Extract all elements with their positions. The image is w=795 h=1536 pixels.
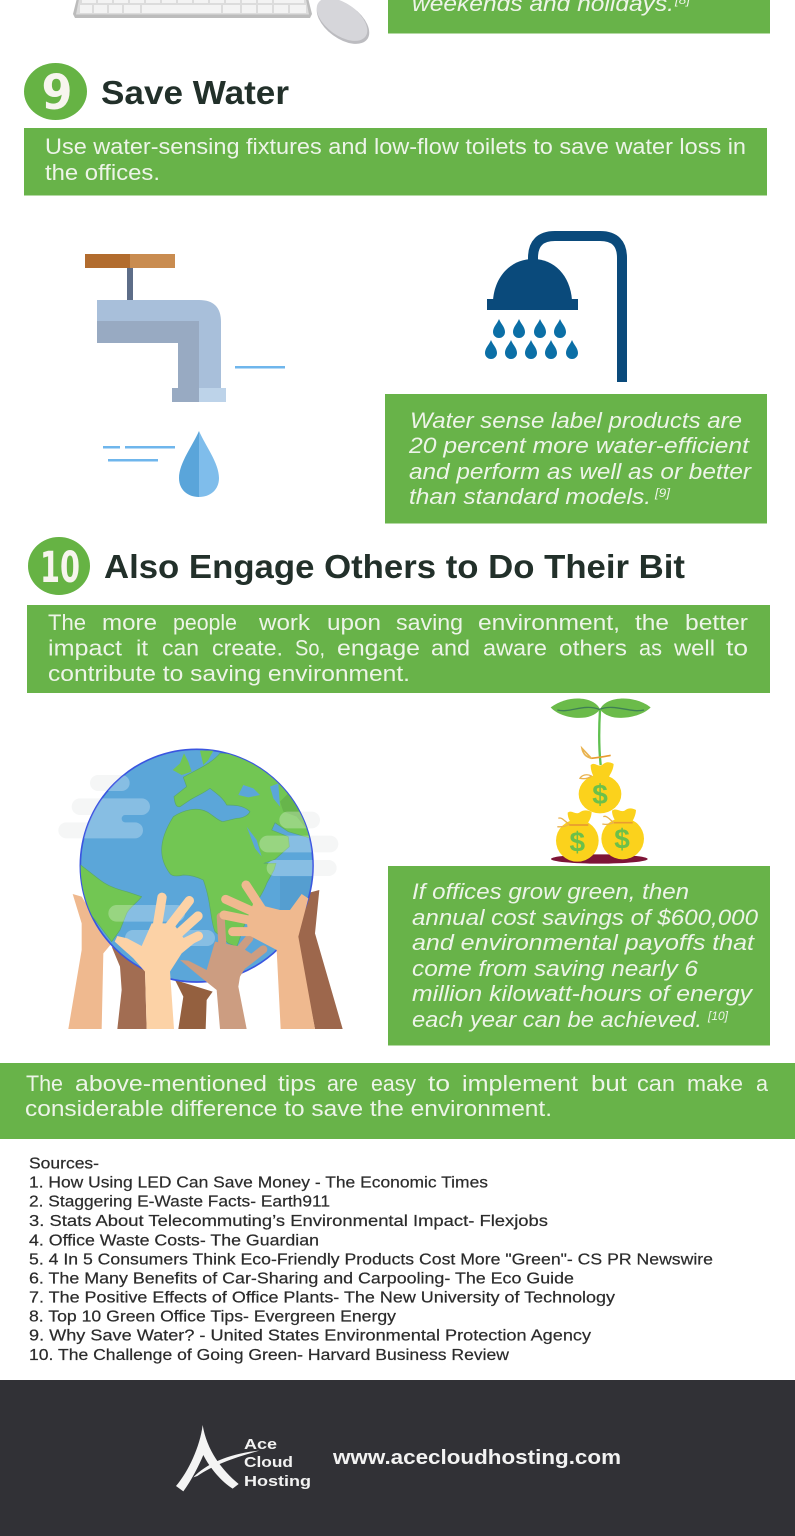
panel: engage others text: work bbox=[258, 610, 311, 635]
panel: offices grow green: each year can be achieved. bbox=[412, 1007, 702, 1032]
text block: sources list: 5. 4 In 5 Consumers Think Eco-Friendly Products Cost More "Green"- CS PR Newswire bbox=[29, 1252, 713, 1268]
text block: sources list: 6. The Many Benefits of Car-Sharing and Carpooling- The Eco Guide bbox=[29, 1270, 574, 1288]
icon: dripping faucet bbox=[85, 254, 285, 497]
panel: engage others text: others bbox=[559, 636, 627, 660]
panel: engage others text bbox=[27, 605, 770, 693]
panel: conclusion bar: make bbox=[687, 1071, 743, 1096]
text block: sources list: 2. Staggering E-Waste Facts- Earth911 bbox=[29, 1194, 330, 1210]
icon: money bags with sprout bbox=[551, 698, 651, 864]
panel: engage others text: contribute to saving environment. bbox=[48, 661, 410, 686]
panel: conclusion bar: but bbox=[591, 1071, 628, 1096]
panel: footer bbox=[0, 1380, 795, 1536]
faint clouds behind globe bbox=[58, 775, 338, 876]
panel: use water-sensing fixtures: Use water-sensing fixtures and low-flow toilets to save water loss in bbox=[45, 134, 746, 159]
illustration: hands holding globe bbox=[58, 749, 343, 1029]
panel: use water-sensing fixtures: the offices. bbox=[45, 160, 160, 185]
panel: conclusion bar: are bbox=[327, 1071, 358, 1096]
panel: conclusion bar: above-mentioned bbox=[75, 1071, 267, 1096]
icon: number 10 badge bbox=[28, 537, 90, 595]
panel: engage others text: it bbox=[136, 636, 149, 660]
panel: engage others text: impact bbox=[48, 636, 123, 660]
callout: weekends and holidays bbox=[388, 0, 770, 34]
text block: sources list: 3. Stats About Telecommuting’s Environmental Impact- Flexjobs bbox=[29, 1213, 548, 1230]
panel: conclusion bar bbox=[0, 1063, 795, 1139]
icon: shower head bbox=[485, 236, 622, 382]
text block: sources list: Sources- bbox=[29, 1156, 99, 1172]
panel: use water-sensing fixtures bbox=[24, 128, 767, 196]
icon: money bags with sprout: $ bbox=[592, 779, 608, 810]
icon: money bags with sprout: $ bbox=[614, 824, 630, 855]
panel: offices grow green: million kilowatt-hours of energy bbox=[412, 981, 754, 1006]
arms behind globe bbox=[68, 890, 343, 1029]
panel: engage others text: aware bbox=[483, 636, 547, 660]
panel: engage others text: better bbox=[685, 610, 749, 635]
panel: engage others text: well bbox=[673, 636, 715, 660]
panel: engage others text: more bbox=[102, 610, 157, 635]
icon: number 10 badge: 10 bbox=[40, 543, 80, 593]
panel: engage others text: The bbox=[48, 610, 86, 635]
panel: engage others text: people bbox=[173, 610, 237, 635]
logo: Ace Cloud Hosting: Cloud bbox=[244, 1454, 293, 1471]
panel: engage others text: as bbox=[639, 636, 662, 660]
panel: conclusion bar: The bbox=[26, 1071, 63, 1096]
panel: conclusion bar: tips bbox=[278, 1071, 316, 1096]
logo: Ace Cloud Hosting bbox=[176, 1425, 311, 1491]
icon: money bags with sprout: $ bbox=[570, 826, 586, 857]
panel: water sense label products: [9] bbox=[654, 486, 671, 500]
panel: engage others text: saving bbox=[396, 610, 463, 635]
icon: keyboard and mouse bbox=[73, 0, 377, 53]
text block: sources list bbox=[29, 1156, 713, 1364]
panel: engage others text: So, bbox=[295, 636, 325, 660]
text block: sources list: 8. Top 10 Green Office Tips- Evergreen Energy bbox=[29, 1308, 396, 1326]
text block: sources list: 1. How Using LED Can Save Money - The Economic Times bbox=[29, 1174, 488, 1192]
panel: offices grow green bbox=[388, 866, 770, 1046]
logo: Ace Cloud Hosting: Hosting bbox=[244, 1473, 311, 1490]
panel: water sense label products: than standard models. bbox=[409, 484, 651, 509]
panel: water sense label products: Water sense label products are bbox=[410, 408, 742, 433]
panel: engage others text: upon bbox=[327, 610, 381, 635]
panel: conclusion bar: implement bbox=[462, 1071, 579, 1096]
panel: engage others text: environment, bbox=[478, 610, 620, 635]
panel: engage others text: and bbox=[431, 636, 470, 660]
panel: engage others text: the bbox=[635, 610, 669, 635]
panel: offices grow green: [10] bbox=[707, 1009, 729, 1023]
logo: Ace Cloud Hosting: Ace bbox=[244, 1436, 277, 1453]
panel: conclusion bar: can bbox=[637, 1071, 675, 1096]
panel: conclusion bar: considerable difference to save the environment. bbox=[25, 1096, 552, 1121]
heading: Also Engage Others: Also Engage Others to Do Their Bit bbox=[104, 548, 685, 585]
panel: conclusion bar: to bbox=[428, 1071, 450, 1096]
website url: www.acecloudhosting.com bbox=[332, 1447, 621, 1469]
panel: water sense label products: 20 percent more water-efficient bbox=[408, 433, 751, 458]
panel: water sense label products bbox=[385, 394, 767, 524]
text block: sources list: 7. The Positive Effects of Office Plants- The New University of Technology bbox=[29, 1290, 615, 1306]
panel: offices grow green: If offices grow green, then bbox=[412, 879, 689, 904]
icon: number 9 badge: 9 bbox=[42, 65, 72, 121]
panel: engage others text: create. bbox=[212, 636, 283, 660]
text block: sources list: 10. The Challenge of Going Green- Harvard Business Review bbox=[29, 1347, 510, 1364]
panel: conclusion bar: a bbox=[756, 1071, 768, 1096]
panel: engage others text: engage bbox=[337, 636, 420, 660]
panel: offices grow green: come from saving nearly 6 bbox=[412, 956, 699, 981]
panel: conclusion bar: easy bbox=[371, 1071, 417, 1096]
panel: engage others text: to bbox=[726, 636, 748, 660]
icon: number 9 badge bbox=[24, 63, 87, 121]
light hand bbox=[115, 897, 200, 1029]
text block: sources list: 4. Office Waste Costs- The Guardian bbox=[29, 1232, 319, 1250]
panel: offices grow green: annual cost savings of $600,000 bbox=[412, 905, 759, 930]
text block: sources list: 9. Why Save Water? - United States Environmental Protection Agency bbox=[29, 1328, 591, 1344]
panel: engage others text: can bbox=[162, 636, 199, 660]
right hand bbox=[224, 885, 315, 1029]
panel: water sense label products: and perform as well as or better bbox=[409, 459, 753, 484]
panel: offices grow green: and environmental payoffs that bbox=[412, 930, 756, 955]
heading: Save Water: Save Water bbox=[101, 74, 289, 111]
medium hand bbox=[180, 917, 263, 1029]
